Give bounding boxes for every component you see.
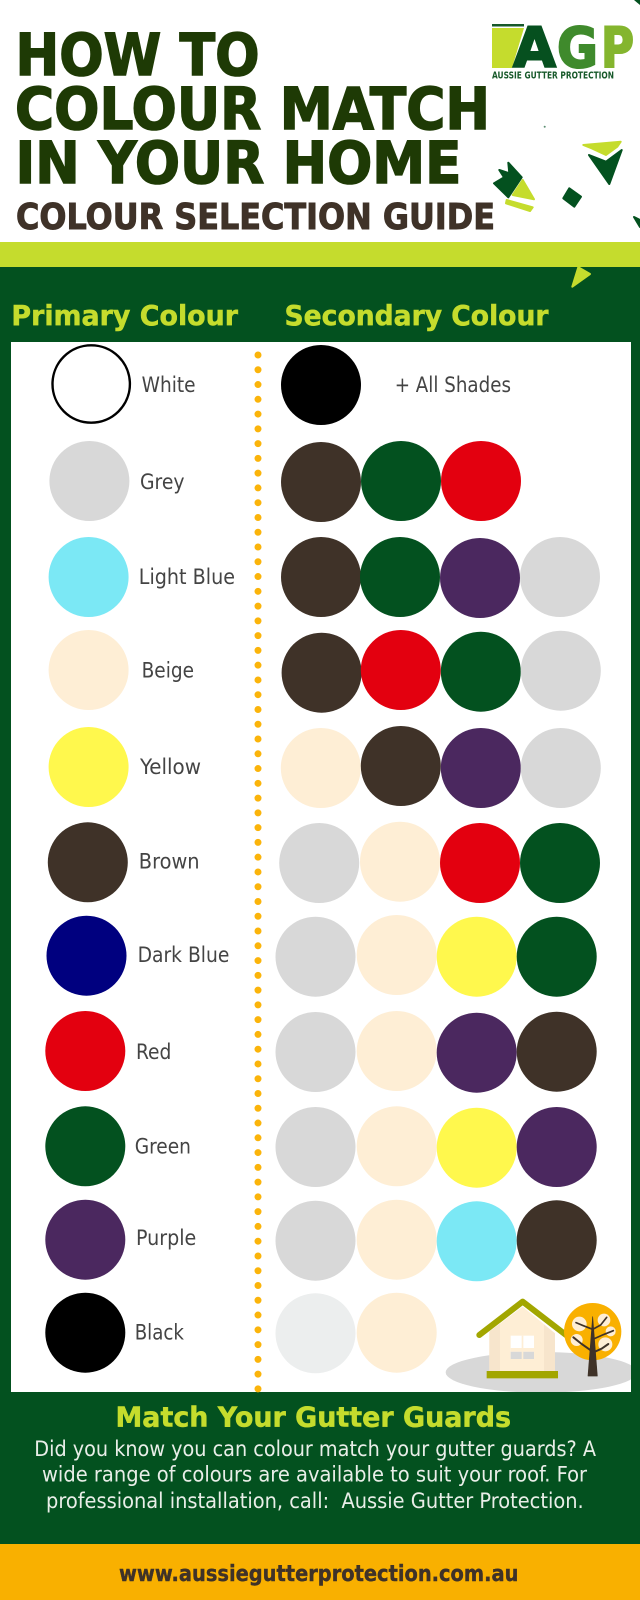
label: dark blue: Dark Blue — [138, 943, 229, 967]
label: yellow: Yellow — [139, 755, 201, 779]
panel: colour table — [11, 342, 631, 1392]
title — [15, 22, 490, 197]
icon: house and tree — [446, 1302, 637, 1393]
label: green: Green — [135, 1134, 191, 1158]
swatch: grey — [49, 441, 129, 521]
secondary swatches: white — [281, 345, 361, 425]
row: purple — [45, 1200, 597, 1281]
heading: primary colour: Primary Colour — [11, 300, 238, 332]
text block: gutter guard description — [34, 1437, 597, 1514]
text block: gutter guard description: wide range of colours are available to suit your roof. For — [42, 1463, 587, 1488]
secondary swatches: light blue — [281, 537, 600, 618]
swatch: beige — [49, 630, 129, 710]
secondary swatches: black — [276, 1293, 437, 1373]
label: black: Black — [135, 1321, 184, 1345]
subtitle: COLOUR SELECTION GUIDE — [16, 197, 495, 238]
swatch: black — [45, 1293, 125, 1373]
row: dark blue — [46, 915, 597, 997]
swatch: yellow — [49, 727, 129, 807]
swatch: green — [45, 1106, 125, 1186]
logo: AGP: A — [513, 16, 556, 80]
swatch: dark blue — [46, 916, 126, 996]
secondary swatches: grey — [281, 441, 521, 522]
note: all shades: + All Shades — [395, 373, 511, 397]
row: yellow — [49, 726, 601, 808]
secondary swatches: yellow — [281, 726, 601, 808]
text block: gutter guard description: Did you know you can colour match your gutter guards? A — [34, 1437, 597, 1462]
secondary swatches: dark blue — [276, 915, 597, 997]
swatch: white — [52, 345, 130, 423]
title: COLOUR MATCH — [15, 76, 490, 143]
row: green — [45, 1106, 597, 1188]
label: purple: Purple — [136, 1226, 196, 1250]
icon: decorative leaf shapes — [494, 0, 640, 287]
swatch: brown — [48, 822, 128, 902]
row: beige — [49, 630, 601, 713]
row: red — [45, 1011, 597, 1093]
footer url: www.aussiegutterprotection.com.au — [119, 1562, 518, 1587]
row: brown — [48, 822, 600, 903]
row: white — [52, 345, 511, 425]
secondary swatches: beige — [282, 630, 601, 713]
label: beige: Beige — [142, 658, 194, 682]
swatch: red — [45, 1011, 125, 1091]
secondary swatches: purple — [276, 1200, 597, 1281]
row: grey — [49, 441, 521, 522]
label: light blue: Light Blue — [139, 565, 235, 589]
label: red: Red — [136, 1040, 171, 1064]
secondary swatches: red — [276, 1011, 597, 1093]
label: brown: Brown — [139, 850, 200, 874]
label: white: White — [142, 373, 196, 397]
logo: AGP — [492, 16, 634, 82]
title: IN YOUR HOME — [16, 130, 462, 197]
secondary swatches: green — [276, 1106, 597, 1188]
text block: gutter guard description: professional installation, call: Aussie Gutter Protection. — [46, 1489, 584, 1514]
swatch: purple — [45, 1200, 125, 1280]
swatch: light blue — [49, 537, 129, 617]
row: black — [45, 1293, 437, 1373]
heading: secondary colour: Secondary Colour — [284, 300, 549, 332]
label: grey: Grey — [140, 470, 184, 494]
secondary swatches: brown — [279, 822, 600, 903]
row: light blue — [49, 537, 600, 618]
logo: AGP: G — [557, 16, 598, 80]
title: HOW TO — [16, 22, 260, 89]
footer band — [0, 1544, 640, 1600]
heading: match your gutter guards: Match Your Gutter Guards — [116, 1402, 511, 1434]
